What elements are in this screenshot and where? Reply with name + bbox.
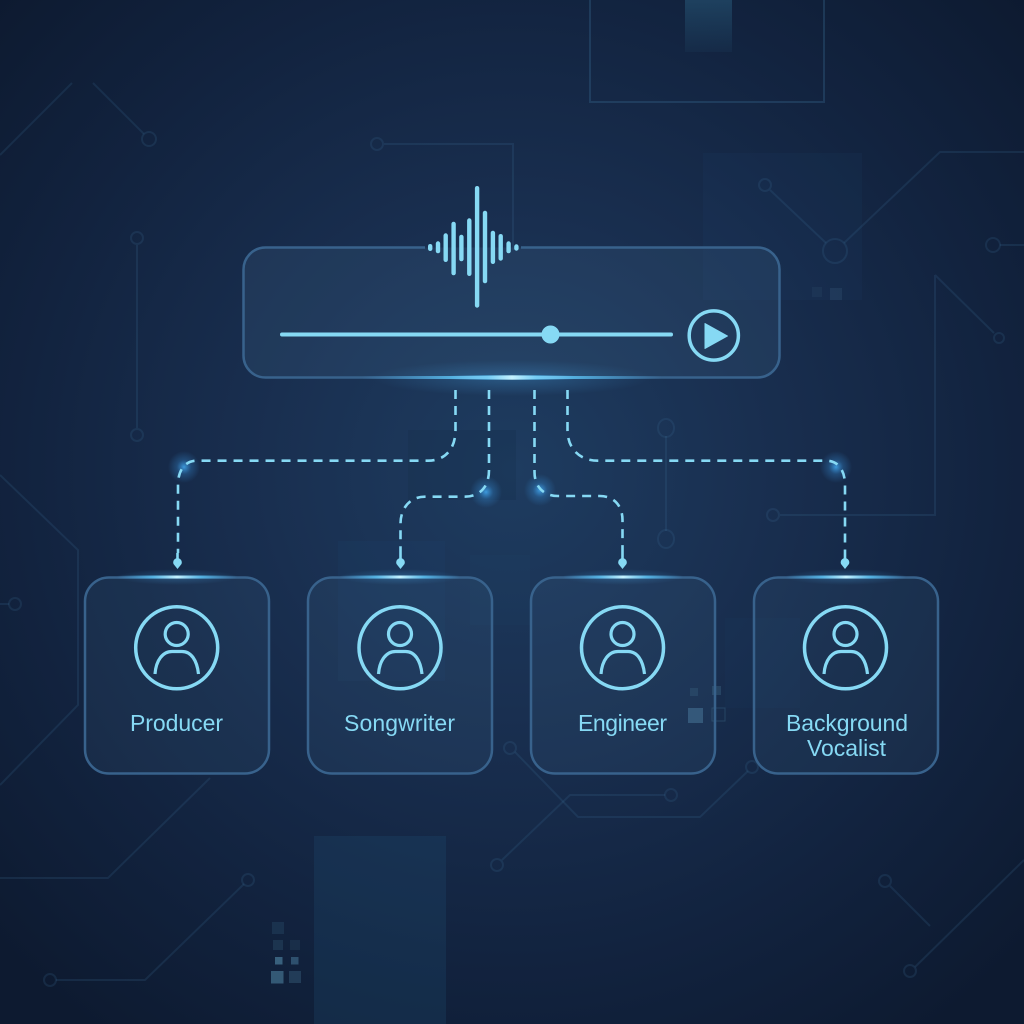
panel: audio player bbox=[244, 186, 780, 396]
icon: person bbox=[136, 607, 218, 689]
glow: player bottom edge bbox=[362, 375, 662, 380]
icon: person bbox=[804, 607, 886, 689]
icon: person bbox=[582, 607, 664, 689]
icon: person bbox=[359, 607, 441, 689]
label: Background Vocalist: Vocalist bbox=[807, 735, 887, 761]
connector: producer bbox=[178, 390, 456, 553]
label: Engineer: Engineer bbox=[578, 710, 667, 736]
arrowheads bbox=[173, 553, 849, 569]
connectors: dashed lines to roles bbox=[168, 390, 852, 569]
card: Producer bbox=[85, 569, 269, 774]
icon: sound waveform bbox=[428, 186, 519, 308]
connector: background vocalist bbox=[568, 390, 845, 553]
icon: play button bbox=[689, 311, 738, 360]
card: Songwriter bbox=[308, 569, 492, 774]
progress slider bbox=[280, 326, 673, 344]
label: Producer: Producer bbox=[130, 710, 223, 736]
connector: engineer bbox=[534, 390, 622, 553]
card: Background Vocalist bbox=[754, 569, 938, 774]
label: Background Vocalist: Background bbox=[786, 710, 908, 736]
card: Engineer bbox=[531, 569, 715, 774]
label: Songwriter: Songwriter bbox=[344, 710, 455, 736]
connector: songwriter bbox=[400, 390, 489, 553]
